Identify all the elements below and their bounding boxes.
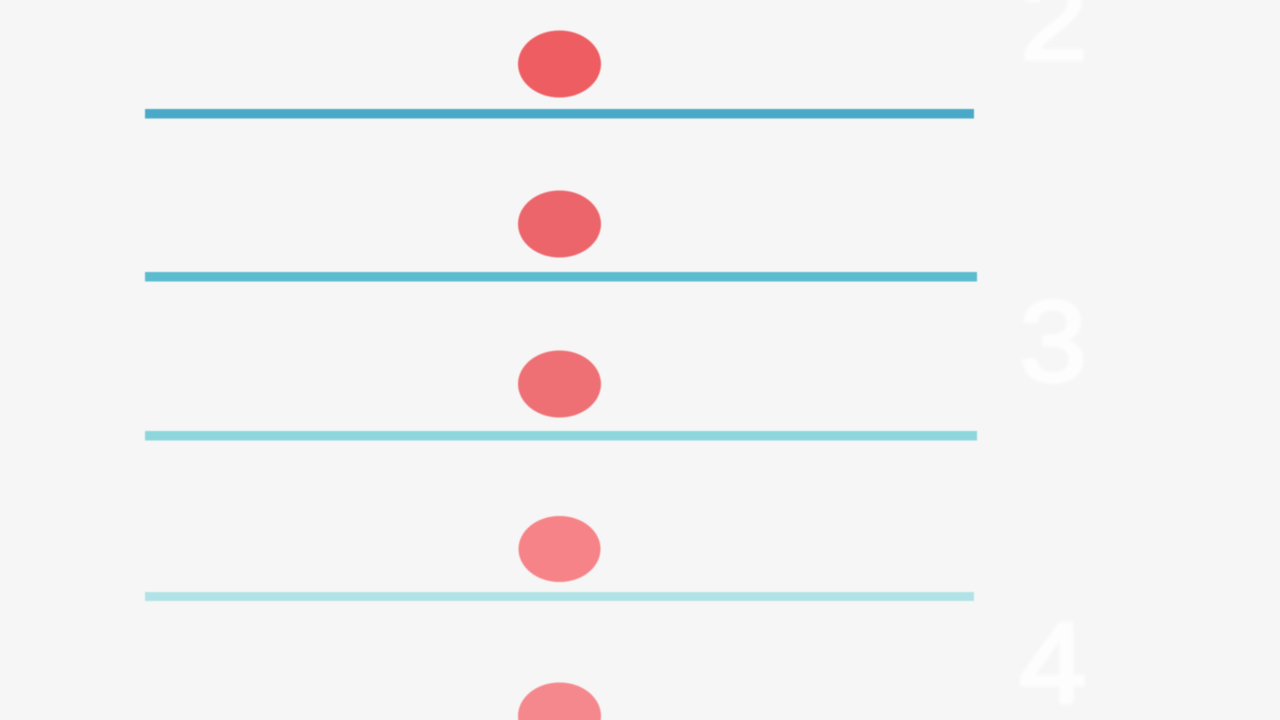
row 3: dot and line	[145, 350, 977, 440]
row 1: dot and line	[145, 30, 974, 118]
row 2: dot and line	[145, 190, 977, 282]
row 5: dot	[518, 682, 601, 720]
row 4: dot and line	[145, 516, 974, 601]
number 3: 3	[1019, 278, 1087, 406]
